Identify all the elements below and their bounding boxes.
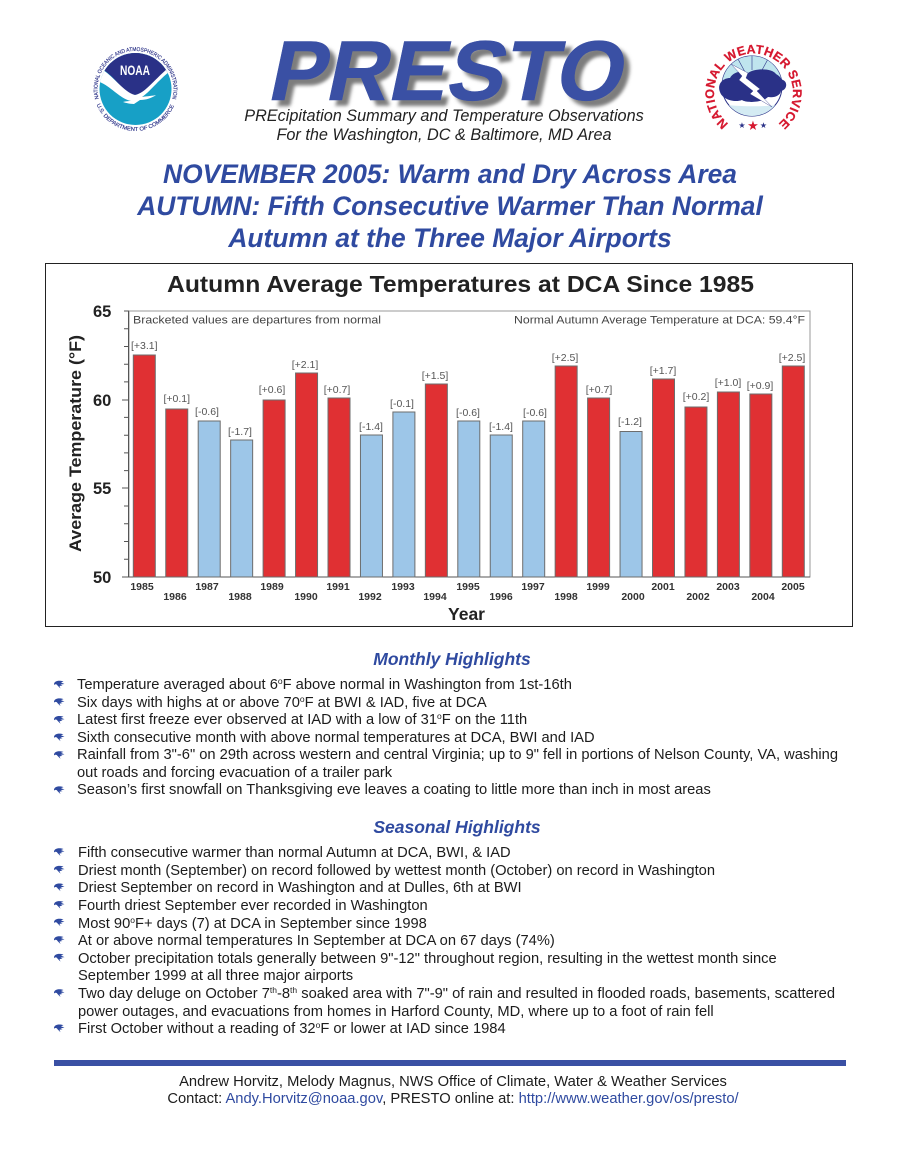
main heading: AUTUMN: Fifth Consecutive Warmer Than Normal xyxy=(137,191,763,221)
departure labels: [-1.4] xyxy=(489,421,513,433)
list: seasonal highlights: At or above normal temperatures In September at DCA on 67 days (74%) xyxy=(78,933,555,949)
departure labels: [+1.5] xyxy=(422,370,448,382)
y axis labels: 50 xyxy=(93,569,111,587)
year labels: 1988 xyxy=(228,591,252,603)
panel: bar chart frame xyxy=(45,263,853,627)
list: monthly highlights: out roads and forcing evacuation of a trailer park xyxy=(77,765,392,781)
departure labels: [-1.4] xyxy=(359,421,383,433)
departure labels xyxy=(131,340,805,438)
departure labels: [+0.1] xyxy=(163,393,190,405)
list: seasonal highlights: Most 90oF+ days (7) at DCA in September since 1998 xyxy=(78,915,427,932)
y axis labels: 65 xyxy=(93,303,111,321)
year labels: 1987 xyxy=(195,581,219,593)
list: seasonal highlights: First October without a reading of 32oF or lower at IAD since 1984 xyxy=(78,1020,506,1037)
footer credits xyxy=(167,1074,739,1107)
departure labels: [+0.2] xyxy=(683,391,709,403)
list: seasonal highlights: Two day deluge on October 7th-8th soaked area with 7"-9" of rain and resulted in flooded roads, basements, scattered xyxy=(78,985,835,1002)
year labels: 1993 xyxy=(391,581,415,593)
footer credits: Contact: Andy.Horvitz@noaa.gov, PRESTO online at: http://www.weather.gov/os/presto/ xyxy=(167,1091,739,1107)
year labels: 1992 xyxy=(358,591,382,603)
departure labels: [+2.5] xyxy=(552,352,578,364)
list: monthly highlights: Temperature averaged about 6oF above normal in Washington from 1st-16th xyxy=(77,676,572,693)
departure labels: [+1.7] xyxy=(650,365,676,377)
list: monthly highlights: Six days with highs at or above 70oF at BWI & IAD, five at DCA xyxy=(77,694,487,711)
subtitle xyxy=(244,107,644,144)
logo: National Weather Service: NATIONAL WEATHER SERVICE xyxy=(705,44,802,130)
list: seasonal highlights: Fifth consecutive warmer than normal Autumn at DCA, BWI, & IAD xyxy=(78,845,511,861)
list: monthly highlights: Sixth consecutive month with above normal temperatures at DCA, BWI and IAD xyxy=(77,730,595,746)
departure labels: [-0.1] xyxy=(390,398,414,410)
list: seasonal highlights: Fourth driest September ever recorded in Washington xyxy=(78,898,428,914)
departure labels: [+2.1] xyxy=(292,359,318,371)
bar chart: Autumn Average Temperatures at DCA: Normal Autumn Average Temperature at DCA: 59.4°F xyxy=(514,314,805,326)
logo: NOAA: NOAA xyxy=(120,62,150,78)
bar chart: Autumn Average Temperatures at DCA xyxy=(66,271,810,624)
y axis labels: 60 xyxy=(93,392,111,410)
year labels: 1998 xyxy=(554,591,578,603)
year labels: 1991 xyxy=(326,581,350,593)
departure labels: [-1.7] xyxy=(228,426,252,438)
year labels: 1994 xyxy=(423,591,447,603)
bar chart: Autumn Average Temperatures at DCA: Average Temperature (°F) xyxy=(66,335,85,552)
logo: NOAA xyxy=(94,47,178,131)
y axis labels xyxy=(93,303,111,587)
year labels: 2005 xyxy=(781,581,805,593)
year labels: 2001 xyxy=(651,581,675,593)
list: seasonal highlights: Driest month (September) on record followed by wettest month (October) on record in Washington xyxy=(78,863,715,879)
logo: National Weather Service: ★ xyxy=(760,121,767,130)
main heading: Autumn at the Three Major Airports xyxy=(228,223,672,253)
logo: National Weather Service: ★ xyxy=(738,121,746,130)
list: seasonal highlights: power outages, and evacuations from homes in Harford County, MD, where up to a foot of rain fell xyxy=(78,1004,714,1020)
departure labels: [+0.7] xyxy=(586,384,612,396)
y axis labels: 55 xyxy=(93,480,111,498)
list: seasonal highlights: September 1999 at all three major airports xyxy=(78,968,353,984)
year labels: 1999 xyxy=(586,581,610,593)
departure labels: [+1.0] xyxy=(715,377,741,389)
list: seasonal highlights: Driest September on record in Washington and at Dulles, 6th at BWI xyxy=(78,880,522,896)
list: monthly highlights: Season’s first snowfall on Thanksgiving eve leaves a coating to little more than inch in most areas xyxy=(77,782,711,798)
logo: NOAA: NATIONAL OCEANIC AND ATMOSPHERIC ADMINISTRATION xyxy=(94,47,178,100)
year labels: 1990 xyxy=(294,591,318,603)
heading: Seasonal Highlights: Seasonal Highlights xyxy=(373,817,541,837)
logo: PRESTO wordmark: PRESTO xyxy=(268,30,642,125)
year labels: 1997 xyxy=(521,581,545,593)
departure labels: [+2.5] xyxy=(779,352,805,364)
subtitle: PREcipitation Summary and Temperature Observations xyxy=(244,107,644,125)
year labels: 2002 xyxy=(686,591,710,603)
subtitle: For the Washington, DC & Baltimore, MD Area xyxy=(276,126,612,144)
departure labels: [-1.2] xyxy=(618,416,642,428)
list: seasonal highlights: October precipitation totals generally between 9"-12" throughout region, resulting in the wettest month since xyxy=(78,951,777,967)
year labels: 1989 xyxy=(260,581,284,593)
year labels: 1995 xyxy=(456,581,480,593)
chart title: Autumn Average Temperatures at DCA Since 1985 xyxy=(167,271,754,297)
list: monthly highlights: Rainfall from 3"-6" on 29th across western and central Virginia; up to 9" fell in portions of Nelson County, VA, washing xyxy=(77,747,838,763)
year labels: 1985 xyxy=(130,581,154,593)
departure labels: [+0.7] xyxy=(324,384,350,396)
year labels: 2004 xyxy=(751,591,775,603)
year labels: 1986 xyxy=(163,591,187,603)
departure labels: [-0.6] xyxy=(523,407,547,419)
departure labels: [-0.6] xyxy=(456,407,480,419)
divider bar xyxy=(54,1060,846,1066)
departure labels: [-0.6] xyxy=(195,406,219,418)
year labels: 2000 xyxy=(621,591,645,603)
list: monthly highlights: Latest first freeze ever observed at IAD with a low of 31oF on the 11th xyxy=(77,711,527,728)
notes: Bracketed values are departures from normal xyxy=(133,314,381,326)
departure labels: [+0.6] xyxy=(259,384,285,396)
main heading: NOVEMBER 2005: Warm and Dry Across Area xyxy=(163,159,737,189)
year labels xyxy=(130,581,805,603)
list: monthly highlights xyxy=(54,676,838,798)
main heading xyxy=(136,159,764,253)
year labels: 2003 xyxy=(716,581,740,593)
bar chart: Autumn Average Temperatures at DCA: Year xyxy=(448,604,485,624)
logo: National Weather Service: ★ xyxy=(747,118,759,133)
logo: PRESTO wordmark: PRESTO xyxy=(262,24,636,119)
departure labels: [+0.9] xyxy=(747,380,773,392)
footer credits: Andrew Horvitz, Melody Magnus, NWS Office of Climate, Water & Weather Services xyxy=(179,1074,727,1090)
bars xyxy=(133,355,804,577)
heading: Monthly Highlights: Monthly Highlights xyxy=(373,649,531,669)
logo: NOAA: U.S. DEPARTMENT OF COMMERCE xyxy=(97,103,174,131)
year labels: 1996 xyxy=(489,591,513,603)
departure labels: [+3.1] xyxy=(131,340,158,352)
